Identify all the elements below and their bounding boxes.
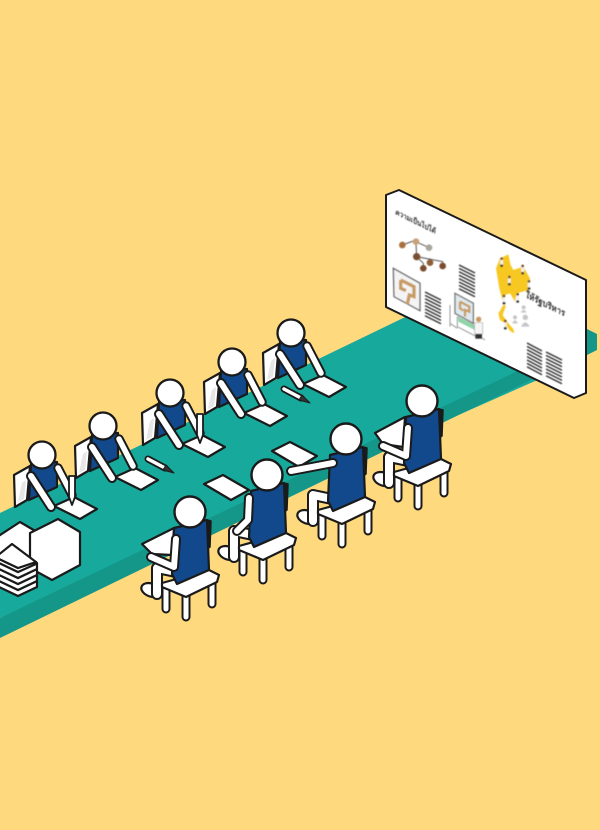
map pins	[500, 257, 530, 329]
grey people	[512, 305, 530, 327]
hospital bed and doctor illustration	[450, 293, 485, 340]
table	[0, 305, 597, 638]
seated person back row 2	[75, 412, 158, 490]
board contents	[393, 207, 566, 384]
text lines block 3	[527, 343, 542, 375]
paper on table front right	[272, 442, 317, 467]
paper on table front left	[204, 475, 249, 500]
intestine icon panel	[393, 268, 420, 311]
front person C pointing	[291, 424, 375, 544]
seated person back row 5	[263, 320, 346, 397]
seated person back row 1	[14, 442, 97, 519]
board heading: ความเป็นไปได้	[395, 207, 437, 236]
family tree diagram	[399, 238, 446, 272]
front person B	[216, 460, 296, 580]
loose pen right	[284, 389, 310, 403]
map label: ให้รัฐบริหาร	[524, 289, 566, 319]
text lines block 2	[459, 265, 475, 297]
text lines block 1	[425, 292, 441, 324]
seated person back row 4	[204, 348, 287, 426]
stack of boxes and papers	[0, 519, 80, 596]
loose pen left	[148, 459, 174, 473]
seated person back row 3	[142, 380, 225, 457]
text lines block 4	[546, 352, 562, 384]
map of Thailand	[496, 254, 530, 333]
front person A	[139, 496, 219, 617]
presentation board	[386, 190, 586, 398]
front person D	[371, 386, 451, 506]
